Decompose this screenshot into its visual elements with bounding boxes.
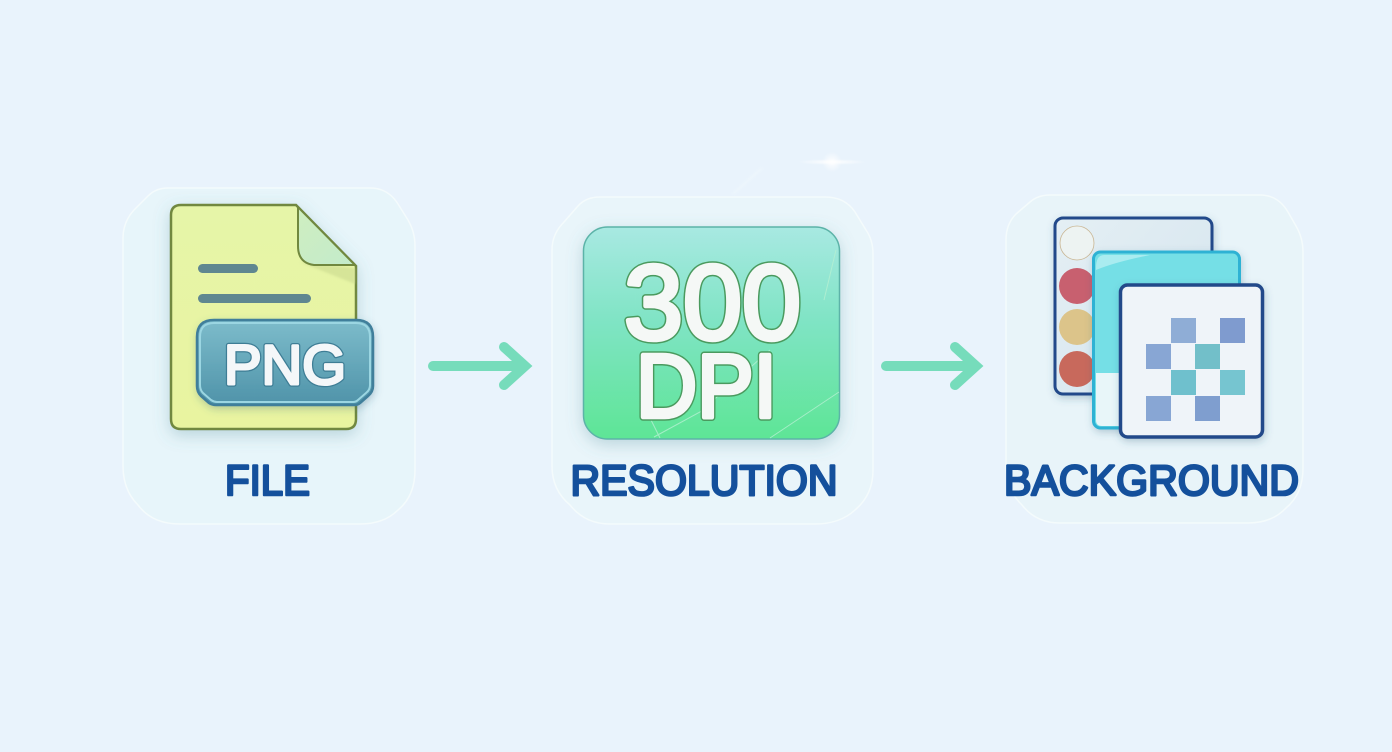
swatch: white <box>1060 226 1094 260</box>
DPI unit: DPI <box>636 337 777 437</box>
text line 1 <box>198 264 258 273</box>
panel: resolution <box>552 197 873 524</box>
checker pattern <box>1146 318 1245 421</box>
icon: 300 DPI tile <box>584 227 840 439</box>
label: RESOLUTION: RESOLUTION <box>570 457 838 505</box>
swatch: yellow <box>1059 309 1095 345</box>
DPI unit: DPI <box>636 337 777 437</box>
label: FILE: FILE <box>225 457 310 505</box>
panel card <box>1006 195 1303 523</box>
arrow 1 <box>433 347 525 385</box>
icon: layered backgrounds <box>1055 218 1262 437</box>
middle layer <box>1094 252 1240 428</box>
swatch: red <box>1059 268 1095 304</box>
fold shadow <box>300 262 355 284</box>
sparkle <box>733 152 866 194</box>
panel card <box>123 188 415 524</box>
PNG text: PNG <box>224 333 346 396</box>
icon: PNG document <box>171 205 373 429</box>
back layer with swatches <box>1055 218 1212 394</box>
document sheet <box>171 205 356 429</box>
swatch: orange <box>1059 351 1095 387</box>
glass cracks <box>651 250 839 438</box>
front layer <box>1120 285 1262 437</box>
arrow 2 <box>886 347 976 385</box>
panel: file <box>123 188 415 524</box>
PNG text: PNG <box>224 333 346 396</box>
label: BACKGROUND: BACKGROUND <box>1004 457 1299 505</box>
panel card <box>552 197 873 524</box>
300 value: 300 <box>624 244 801 362</box>
300 value: 300 <box>624 244 801 362</box>
panel: background <box>1004 195 1303 523</box>
PNG badge <box>197 320 373 405</box>
tile <box>584 227 840 439</box>
text line 2 <box>198 294 311 303</box>
folded corner <box>298 207 355 265</box>
